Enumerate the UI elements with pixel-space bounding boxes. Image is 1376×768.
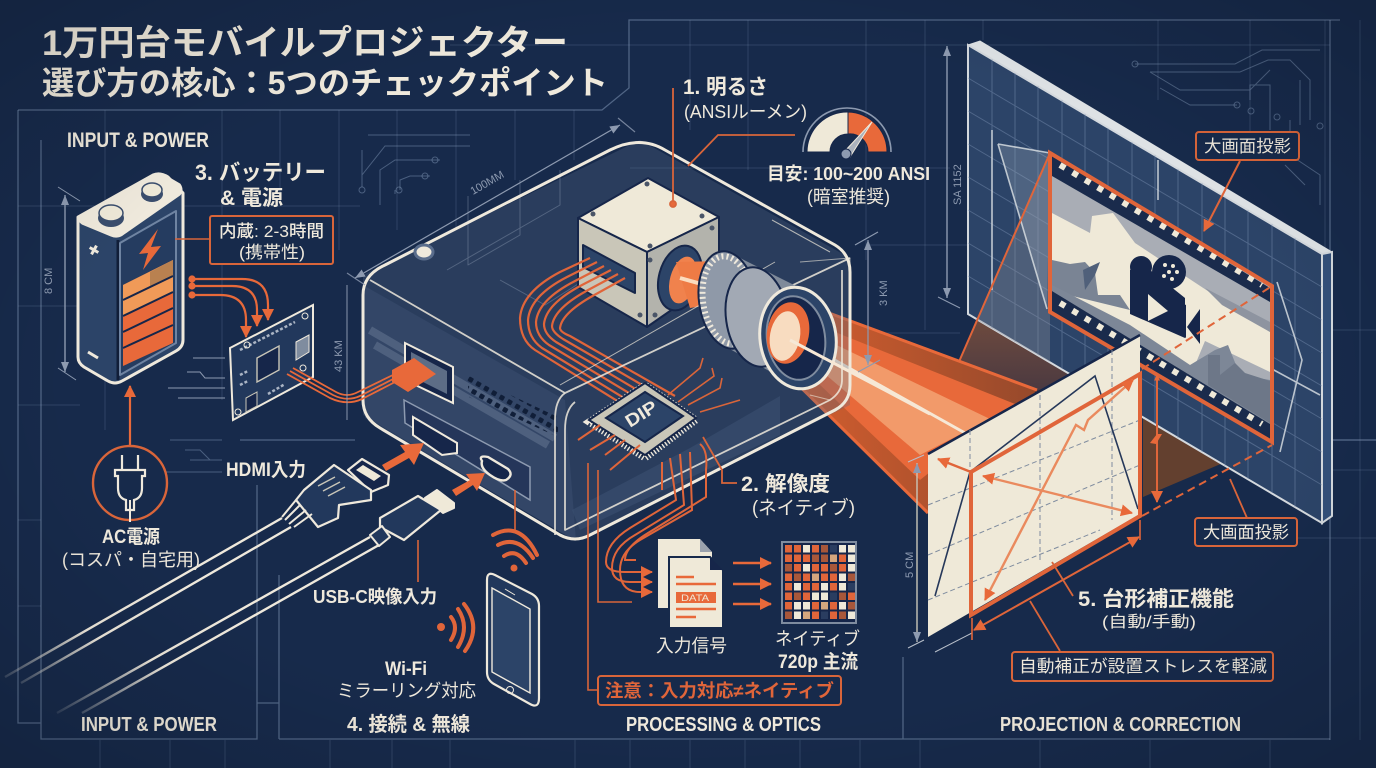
label: battery heading: 3. バッテリー: [195, 160, 326, 185]
callout: big screen bottom: 大画面投影: [1203, 523, 1289, 542]
chip: dip processor: [589, 383, 696, 458]
dimension arrow below sheet: [972, 520, 1140, 640]
panel: big screen: [958, 41, 1332, 523]
callout: auto correction: [1012, 652, 1273, 681]
icon: input documents: [658, 539, 723, 628]
leader: resolution: [703, 437, 737, 483]
label: resolution: 2. 解像度: [741, 473, 830, 496]
chip: dip processor: DIP: [622, 396, 661, 431]
label: keystone: (自動/手動): [1102, 613, 1196, 631]
light engine cube: [578, 178, 719, 327]
panel: projector body: [363, 140, 850, 541]
title: 1万円台モバイルプロジェクター: [42, 24, 568, 63]
icon: movie camera: [1130, 255, 1200, 344]
callout: internal battery: 内蔵: 2-3時間: [219, 222, 324, 241]
box dimension text: 100MM: [468, 169, 506, 198]
network port: [405, 343, 453, 403]
section label: connection: 4. 接続 & 無線: [347, 713, 470, 736]
label: brightness guide: (暗室推奨): [807, 187, 890, 207]
screen dimension: [938, 46, 964, 308]
label: wifi mirroring: ミラーリング対応: [337, 681, 476, 701]
arrow: battery from ac plug: [129, 386, 131, 446]
correction arrows: [938, 380, 1133, 600]
lens assembly: [692, 247, 843, 394]
film frame with projected image: [1050, 153, 1272, 442]
icon: ac plug: [93, 446, 167, 522]
keystone corrected frame: [971, 374, 1140, 615]
leaders to keystone label: [1030, 562, 1073, 651]
label: wifi mirroring: Wi-Fi: [385, 659, 427, 680]
label: brightness guide: 目安: 100~200 ANSI: [767, 164, 930, 184]
label: brightness: 1. 明るさ: [683, 76, 768, 99]
panel: keystone sheet: [928, 335, 1140, 637]
icon: circuit board: [168, 305, 313, 420]
label: ac power: (コスパ・自宅用): [62, 550, 200, 570]
internal wiring board: [572, 396, 780, 530]
label: native 720p: 720p 主流: [778, 651, 858, 673]
title: 選び方の核心：5つのチェックポイント: [42, 65, 608, 101]
label: battery heading: & 電源: [220, 187, 283, 210]
beam over lens: [790, 340, 930, 414]
section label: projection: PROJECTION & CORRECTION: [1000, 714, 1241, 736]
label: input signal: 入力信号: [656, 636, 727, 656]
label: brightness guide: [767, 164, 930, 207]
film center image: [1052, 213, 1270, 424]
leader lines to caution: [588, 463, 632, 690]
icon: wifi lower: [437, 604, 473, 651]
projected shadow on floor: [958, 320, 1223, 497]
callout: internal battery: [175, 216, 333, 264]
sheet dimensions: 5 CM: [904, 552, 916, 578]
wires chip to input documents: [578, 425, 706, 592]
wires to cube: [520, 258, 675, 415]
outer shell edges: [363, 142, 850, 539]
label: brightness: (ANSIルーメン): [684, 102, 807, 122]
icon: lightning bolt: [139, 229, 161, 270]
film perforations: [1060, 165, 1262, 424]
pixel matrix: [782, 542, 856, 623]
callout: caution: [598, 676, 841, 705]
film top strip: [1052, 155, 1270, 302]
battery charge bars: [123, 260, 173, 366]
label: resolution: (ネイティブ): [752, 496, 855, 519]
usb-c port: [481, 456, 511, 480]
label: ac power: [62, 526, 200, 570]
vents: [467, 375, 558, 437]
arrows: cable to port: [382, 443, 485, 496]
callout: big screen bottom: [1195, 479, 1297, 546]
vertical offset arrow: [1150, 375, 1162, 502]
arrows: documents to matrix: [733, 563, 771, 604]
beam cube to lens: [676, 261, 740, 308]
callout: big screen top: 大画面投影: [1204, 137, 1291, 156]
dashed projection lines: [1142, 286, 1272, 516]
arrows: battery to pcb: [190, 276, 268, 337]
ribbon pcb to port: [287, 368, 395, 402]
hdmi port: [413, 417, 457, 455]
label: ac power: AC電源: [102, 526, 160, 548]
callout: auto correction: 自動補正が設置ストレスを軽減: [1019, 657, 1267, 676]
leader: usb-c: [417, 540, 419, 582]
port panel: [404, 400, 530, 500]
icon: battery: [78, 174, 183, 383]
label: keystone: [1078, 588, 1234, 631]
battery dimension arrow: 8 CM: [43, 268, 55, 294]
icon: input documents: DATA: [681, 593, 709, 603]
box dimension arrows: [347, 118, 880, 420]
rear i/o ports: [287, 343, 530, 500]
section label: input and power bottom: INPUT & POWER: [81, 714, 217, 736]
callout: big screen top: [1196, 132, 1299, 231]
chip upper traces: [668, 358, 740, 412]
label: battery heading: [195, 160, 326, 210]
text: 43 KM: [333, 340, 345, 372]
label: brightness: [683, 76, 807, 122]
callout: caution: 注意：入力対応≠ネイティブ: [605, 680, 834, 701]
icon: wifi upper: [493, 530, 537, 572]
label: hdmi input: HDMI入力: [226, 459, 306, 481]
status led: [415, 245, 433, 259]
label: resolution: [741, 473, 855, 519]
label: native 720p: [775, 628, 860, 673]
front lens hood edge over beam: [800, 258, 850, 400]
projector light beam: [768, 303, 1037, 513]
label: wifi mirroring: [337, 659, 476, 701]
icon: smartphone: [487, 574, 539, 706]
title: [42, 24, 608, 101]
text: 3 KM: [878, 280, 890, 306]
leader: wifi: [514, 490, 516, 530]
leader and gauge line: [670, 88, 795, 207]
gauge: [803, 108, 891, 159]
cable: hdmi: [5, 459, 389, 683]
screen dimension: SA 1152: [952, 164, 964, 205]
film bottom strip: [1052, 291, 1270, 440]
battery dimension arrow: [43, 187, 80, 380]
label: native 720p: ネイティブ: [775, 628, 860, 649]
callout: internal battery: (携帯性): [239, 243, 305, 262]
sheet dimensions: [904, 455, 972, 652]
section label: input and power top: INPUT & POWER: [67, 129, 209, 152]
cable: usb-c: [57, 490, 454, 713]
section label: processing and optics: PROCESSING & OPTICS: [626, 714, 821, 736]
label: keystone: 5. 台形補正機能: [1078, 588, 1234, 611]
label: usb-c input: USB-C映像入力: [313, 587, 437, 607]
